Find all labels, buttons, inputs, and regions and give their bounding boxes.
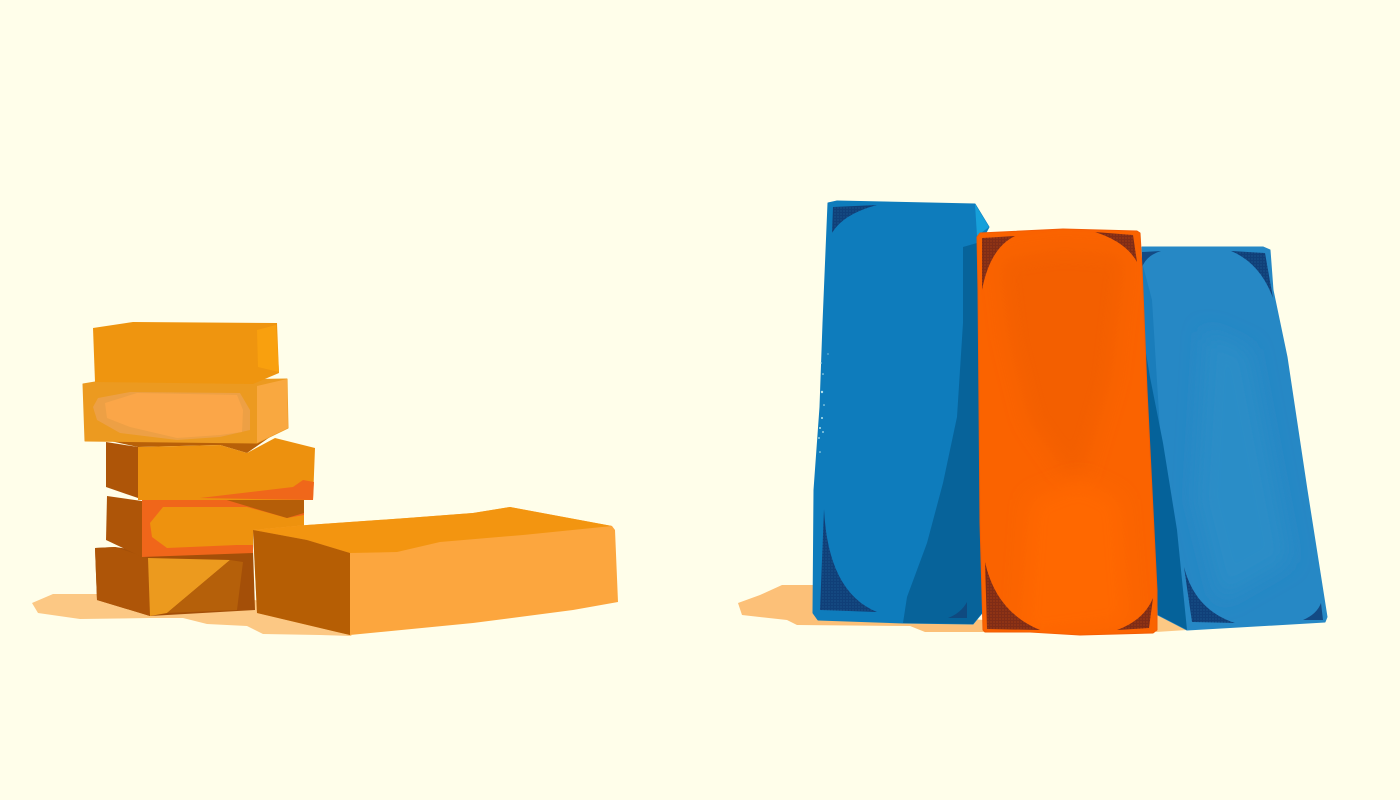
corner shading bottom left xyxy=(985,562,1040,630)
shadow wedge behind right blue block xyxy=(1156,614,1187,632)
corner shading bottom right xyxy=(948,602,967,618)
corner shading bottom right xyxy=(1117,598,1153,630)
corner shading top left xyxy=(832,205,877,233)
speckles xyxy=(818,353,829,453)
brick 1: top of stack xyxy=(93,322,279,384)
block: centre orange xyxy=(977,229,1157,640)
brick 3 xyxy=(106,430,315,500)
corner shading bottom left xyxy=(1184,567,1235,623)
brick 6: large front brick xyxy=(253,507,618,635)
brick 4 xyxy=(106,496,304,557)
illustration: stacked bricks and upright blocks xyxy=(32,200,1328,636)
block: right blue xyxy=(1142,247,1327,630)
right ground shadow xyxy=(738,585,985,632)
corner shading top right xyxy=(1095,232,1137,262)
left ground shadow xyxy=(32,594,352,636)
brick 2 xyxy=(83,379,288,443)
left brick pile xyxy=(83,322,618,635)
block: left blue xyxy=(813,201,989,624)
corner shading bottom right xyxy=(1303,603,1323,620)
brick 5: bottom of stack xyxy=(95,547,255,616)
right blocks xyxy=(813,201,1327,640)
corner shading bottom left xyxy=(820,509,877,612)
corner shading top right xyxy=(1231,251,1273,298)
corner shading top left xyxy=(982,236,1015,290)
corner shading top left xyxy=(1142,251,1161,267)
